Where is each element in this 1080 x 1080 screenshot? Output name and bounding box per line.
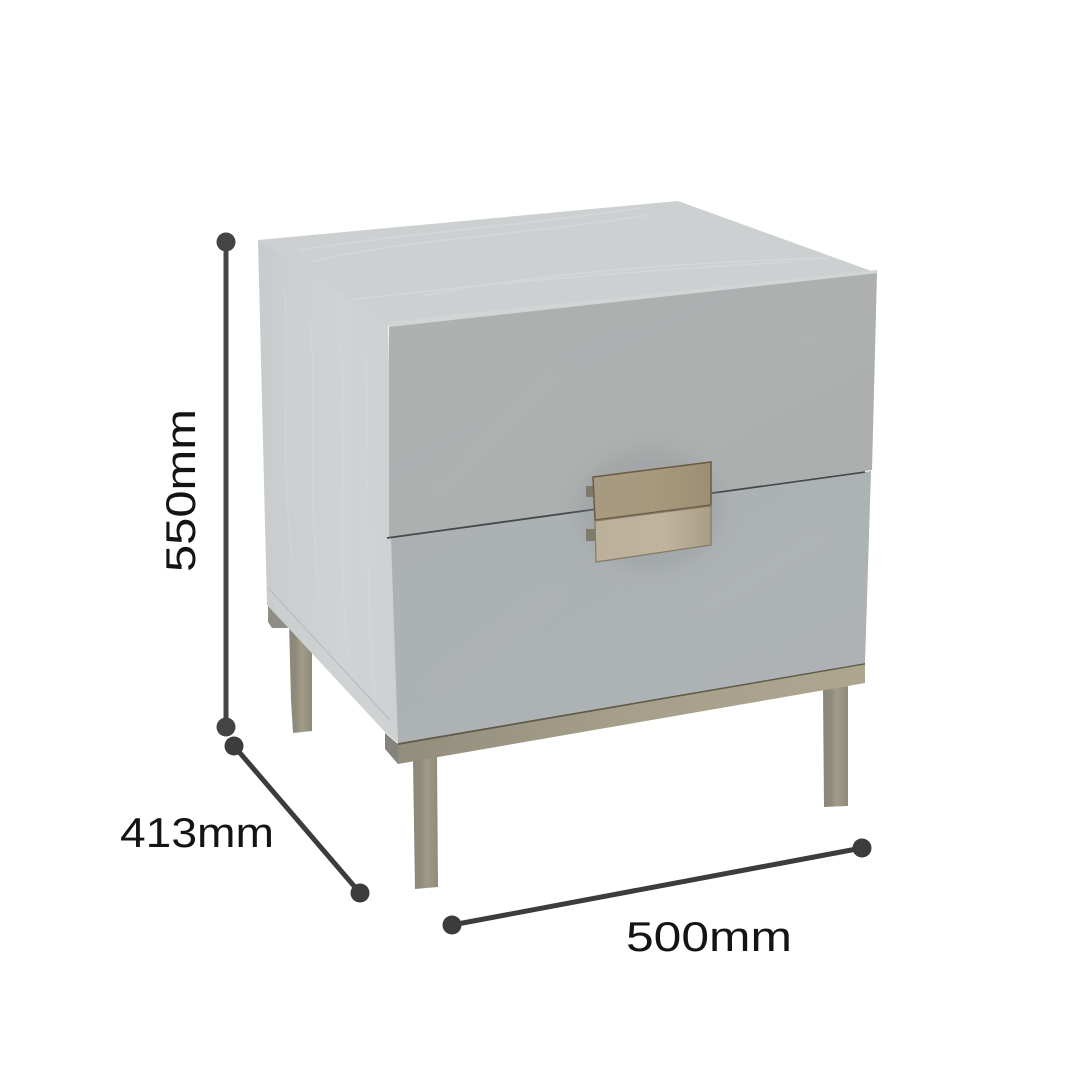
dimension: width — [442, 838, 872, 934]
handle mounts — [586, 486, 595, 541]
front leg — [413, 757, 438, 889]
drawer sheen — [430, 330, 830, 690]
dimension: depth — [224, 736, 370, 902]
label: height: 550mm — [157, 409, 204, 572]
back left leg — [268, 603, 312, 733]
handle — [578, 450, 722, 570]
label: depth: 413mm — [120, 809, 274, 856]
metal base frame — [385, 663, 865, 764]
bedside table — [258, 201, 877, 889]
lower handle plate — [595, 506, 711, 562]
side panel — [258, 240, 398, 743]
drawer gap — [387, 472, 865, 538]
label: width: 500mm — [626, 913, 792, 960]
dimension: height — [216, 232, 236, 736]
upper handle plate — [593, 462, 711, 520]
right leg — [823, 686, 848, 807]
upper drawer — [386, 270, 877, 537]
lower drawer — [391, 471, 871, 743]
table top — [258, 201, 877, 325]
